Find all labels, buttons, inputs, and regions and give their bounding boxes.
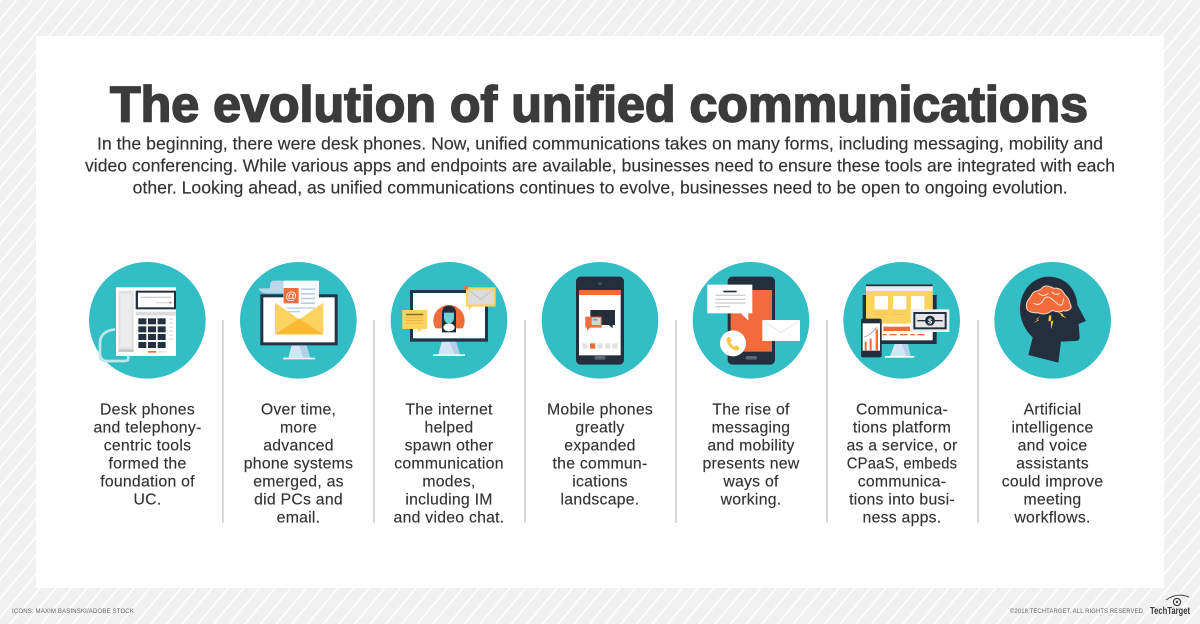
caption 7: intelligence bbox=[1011, 420, 1094, 436]
caption 1: Desk phones bbox=[100, 402, 195, 418]
caption 3: helped bbox=[425, 420, 473, 436]
caption 4: Mobile phones bbox=[547, 402, 653, 418]
intro text: video conferencing. While various apps and endpoints are available, businesses need to ensure these tools are integrated with each bbox=[85, 155, 1115, 175]
caption 5: presents new bbox=[703, 456, 800, 472]
caption 1: foundation of bbox=[100, 474, 195, 490]
icon: CPaaS devices: $ bbox=[928, 316, 932, 325]
caption 7: assistants bbox=[1016, 456, 1089, 472]
caption 6: Communica- bbox=[856, 402, 948, 418]
title: The evolution of unified communications bbox=[110, 77, 1088, 133]
caption 7: workflows. bbox=[1013, 510, 1091, 526]
caption 1: formed the bbox=[108, 456, 187, 472]
caption 7: and voice bbox=[1018, 438, 1087, 454]
caption 2: did PCs and bbox=[254, 492, 343, 508]
intro text: other. Looking ahead, as unified communications continues to evolve, businesses need to be open to ongoing evolution. bbox=[133, 177, 1068, 197]
caption 5 bbox=[703, 402, 800, 508]
caption 5: ways of bbox=[722, 474, 779, 490]
caption 3 bbox=[394, 402, 504, 526]
caption 2: phone systems bbox=[244, 456, 353, 472]
caption 2: emerged, as bbox=[253, 474, 344, 490]
caption 7 bbox=[1002, 402, 1103, 526]
caption 3: and video chat. bbox=[394, 510, 504, 526]
caption 7: meeting bbox=[1024, 492, 1081, 508]
icon: email on monitor bbox=[240, 262, 357, 379]
caption 1: and telephony- bbox=[93, 420, 202, 436]
caption 1: centric tools bbox=[104, 438, 191, 454]
caption 6: tions into busi- bbox=[849, 492, 955, 508]
caption 5: and mobility bbox=[707, 438, 795, 454]
caption 3: communication bbox=[394, 456, 504, 472]
caption 1: UC. bbox=[134, 492, 161, 508]
caption 4: the commun- bbox=[553, 456, 647, 472]
caption 2: advanced bbox=[263, 438, 334, 454]
caption 7: Artificial bbox=[1024, 402, 1081, 418]
caption 4: greatly bbox=[575, 420, 625, 436]
icon credit: ICONS: MAXIM BASINSKI/ADOBE STOCK bbox=[12, 608, 134, 615]
caption 4: landscape. bbox=[561, 492, 639, 508]
icon: desk phone bbox=[89, 262, 206, 379]
caption 7: could improve bbox=[1002, 474, 1103, 490]
caption 3: modes, bbox=[422, 474, 476, 490]
caption 6: as a service, or bbox=[846, 438, 958, 454]
caption 6: communica- bbox=[858, 474, 946, 490]
copyright: ©2018 TECHTARGET. ALL RIGHTS RESERVED bbox=[1010, 607, 1143, 615]
column dividers bbox=[222, 320, 979, 523]
caption 2: more bbox=[280, 420, 317, 436]
caption 2: Over time, bbox=[261, 402, 336, 418]
icon: AI brain head bbox=[994, 262, 1111, 379]
icon: CPaaS devices bbox=[843, 262, 960, 379]
intro text bbox=[85, 133, 1115, 197]
icon: internet video chat bbox=[391, 262, 507, 379]
caption 3: The internet bbox=[405, 402, 493, 418]
caption 5: working. bbox=[720, 492, 781, 508]
caption 5: messaging bbox=[712, 420, 790, 436]
caption 1 bbox=[93, 402, 202, 508]
caption 6: tions platform bbox=[853, 420, 951, 436]
caption 3: spawn other bbox=[405, 438, 493, 454]
caption 5: The rise of bbox=[712, 402, 790, 418]
TechTarget logo bbox=[1150, 595, 1190, 617]
caption 6: CPaaS, embeds bbox=[847, 456, 957, 472]
caption 4 bbox=[547, 402, 653, 508]
caption 3: including IM bbox=[405, 492, 493, 508]
intro text: In the beginning, there were desk phones. Now, unified communications takes on many forms, including messaging, mobility and bbox=[97, 133, 1103, 153]
caption 6: ness apps. bbox=[863, 510, 941, 526]
icon: messaging and mobility bbox=[693, 262, 809, 379]
caption 4: expanded bbox=[564, 438, 636, 454]
caption 2 bbox=[244, 402, 353, 526]
caption 6 bbox=[846, 402, 958, 526]
icon: mobile phone with chat bbox=[542, 262, 658, 379]
icon: email on monitor: @ bbox=[285, 290, 297, 302]
caption 2: email. bbox=[277, 510, 320, 526]
caption 4: ications bbox=[572, 474, 628, 490]
